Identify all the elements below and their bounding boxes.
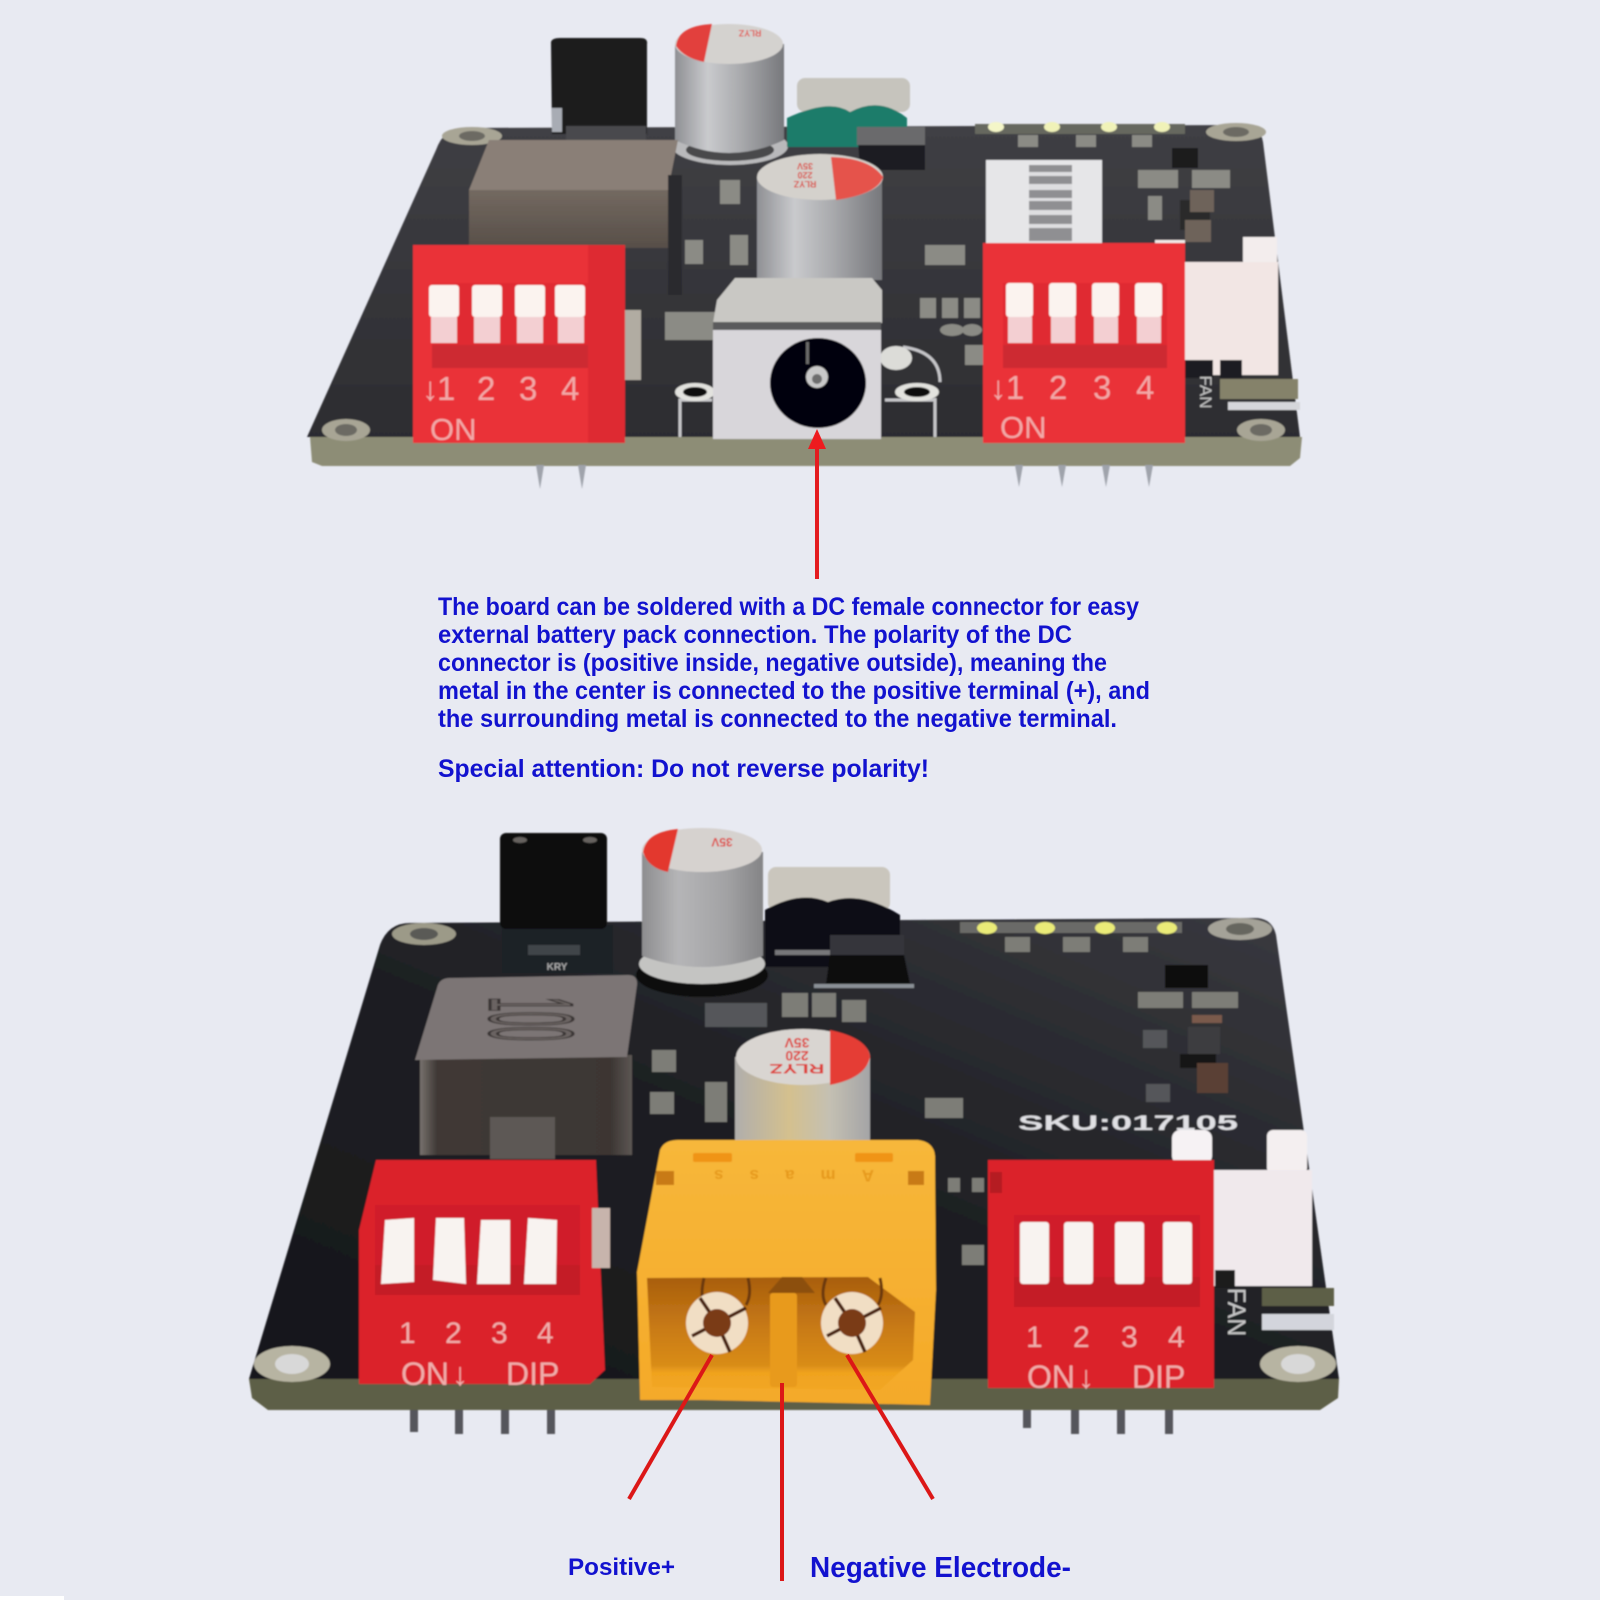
slider switches: [429, 285, 585, 343]
switch numbers: 4: [561, 370, 579, 407]
large capacitor: [636, 828, 768, 997]
small black component: [857, 127, 925, 170]
negative screw: [821, 1278, 883, 1354]
left dip switch: [359, 1160, 610, 1392]
white fan connector: [1155, 237, 1278, 378]
text block: dc connector polarity: The board can be soldered with a DC female connector for easy: [438, 593, 1139, 621]
inductor top board: [469, 140, 682, 295]
switch numbers: 2: [1049, 369, 1067, 406]
on dip label: DIP: [506, 1356, 559, 1392]
switch numbers: 1: [399, 1317, 416, 1350]
label: negative: Negative Electrode-: [810, 1552, 1071, 1584]
switch numbers: 3: [1093, 369, 1111, 406]
pin headers: [410, 1410, 1173, 1434]
mounting holes: [254, 918, 1336, 1382]
photo: board with xt60 connector: [249, 828, 1339, 1434]
inductor marking: 100: [464, 997, 596, 1041]
switch numbers: 3: [519, 370, 537, 407]
switch numbers: 1: [1026, 1321, 1043, 1354]
pcb top board: [307, 125, 1302, 466]
left dip switch: [413, 245, 641, 447]
small black component: [814, 935, 914, 988]
pcb silk outline around jack: [680, 347, 940, 437]
text block: dc connector polarity: external battery pack connection. The polarity of the DC: [438, 621, 1072, 649]
usb-c connector: [765, 867, 900, 967]
second capacitor: [735, 1029, 870, 1150]
on dip label: ↓: [1078, 1359, 1094, 1395]
capacitor marking: RLYZ: [769, 1061, 824, 1077]
text block: dc connector polarity: metal in the center is connected to the positive terminal (+), and: [438, 677, 1150, 705]
mosfet black: [500, 833, 613, 973]
switch numbers: 2: [445, 1317, 462, 1350]
pin headers: [536, 465, 1153, 489]
switch numbers: 1: [1006, 369, 1024, 406]
large capacitor: [672, 24, 788, 165]
on dip label: ON: [401, 1356, 449, 1392]
pcb bottom board: [249, 918, 1339, 1410]
switch numbers: 1: [437, 370, 455, 407]
switch numbers: 2: [477, 370, 495, 407]
smd parts bottom board: [650, 937, 1238, 1265]
capacitor marking: RLYZ: [738, 28, 761, 38]
capacitor marking: 220: [797, 170, 813, 180]
corner strip: [0, 1596, 64, 1600]
on dip label: DIP: [1132, 1359, 1185, 1395]
dc jack: [713, 278, 882, 439]
switch numbers: 2: [1073, 1321, 1090, 1354]
on label: ON: [1000, 410, 1046, 445]
on label: ON: [430, 412, 476, 447]
pointer lines to xt60 terminals: [629, 1355, 933, 1581]
label: positive: Positive+: [568, 1554, 675, 1581]
capacitor marking: [769, 1035, 824, 1077]
switch numbers: 3: [1121, 1321, 1138, 1354]
barcode sticker: [986, 160, 1102, 264]
switch numbers: 4: [537, 1317, 554, 1350]
positive screw: [686, 1278, 750, 1354]
switch numbers: 4: [1168, 1321, 1185, 1354]
xt60 socket interior: [647, 1277, 915, 1390]
on dip label: ↓: [452, 1356, 468, 1392]
slider switches: [381, 1218, 557, 1284]
on dip label: ON: [1027, 1359, 1075, 1395]
mosfet marking: KRY: [547, 962, 568, 973]
capacitor marking: [793, 161, 816, 189]
capacitor marking: 220: [785, 1048, 809, 1064]
usb-c connector: [787, 78, 910, 147]
switch numbers: 4: [1136, 369, 1154, 406]
white fan connector: [1172, 1130, 1312, 1288]
xt60 connector: [637, 1140, 936, 1405]
text block: dc connector polarity: the surrounding metal is connected to the negative terminal.: [438, 705, 1117, 733]
xt60 brand mark: Amass: [714, 1166, 874, 1185]
inductor bottom board: [415, 975, 637, 1159]
capacitor marking: 35V: [711, 835, 733, 849]
pcb drill holes: [675, 346, 939, 401]
warning: polarity: Special attention: Do not reverse polarity!: [438, 755, 929, 783]
capacitor marking: RLYZ: [793, 179, 816, 189]
photo: board with DC connector: [307, 24, 1302, 489]
switch numbers: ↓: [422, 370, 438, 407]
sku label: SKU:017105: [1018, 1112, 1239, 1135]
capacitor marking: 35V: [784, 1035, 809, 1051]
second capacitor: [757, 154, 883, 280]
switch numbers: 3: [491, 1317, 508, 1350]
switch numbers: ↓: [990, 369, 1006, 406]
slider switches: [1020, 1222, 1192, 1284]
fan silk label: FAN: [1196, 375, 1215, 409]
text block: dc connector polarity: connector is (positive inside, negative outside), meaning the: [438, 649, 1107, 677]
leds: [975, 122, 1185, 134]
smd parts top board: [665, 135, 1230, 365]
fan silk label: FAN: [1222, 1288, 1250, 1336]
right dip switch: [988, 1160, 1214, 1395]
right dip switch: [983, 243, 1185, 445]
leds: [960, 922, 1182, 934]
mosfet black: [551, 38, 647, 140]
capacitor marking: 35V: [797, 161, 813, 171]
arrow to dc connector: [808, 429, 826, 579]
mounting holes: [322, 123, 1285, 441]
slider switches: [1006, 283, 1162, 343]
